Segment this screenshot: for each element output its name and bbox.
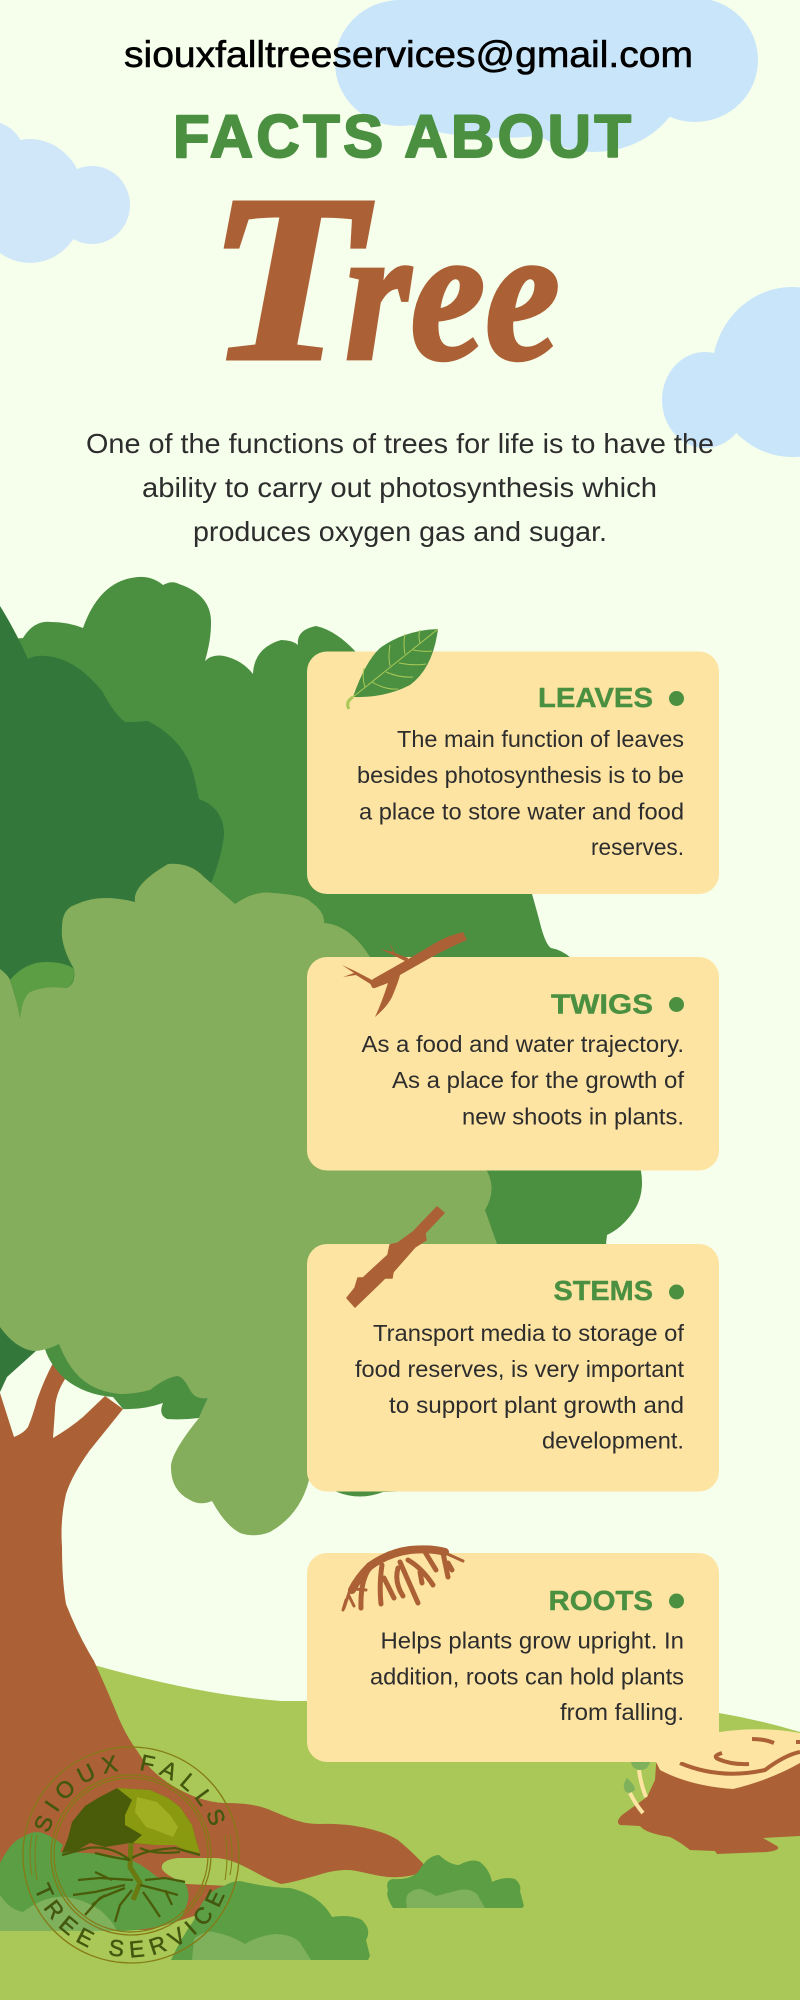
card: stems: food reserves, is very important [355, 1356, 685, 1382]
tree crown: light green [0, 864, 497, 1535]
card: roots: from falling. [560, 1699, 684, 1725]
card: stems [307, 1244, 719, 1492]
intro paragraph: ability to carry out photosynthesis which [142, 472, 657, 503]
logo: sioux falls tree service: SIOUX FALLS [35, 1754, 225, 1832]
tree crown: small patch [10, 962, 74, 1019]
intro paragraph: One of the functions of trees for life is to have the [86, 428, 714, 459]
card: twigs: new shoots in plants. [462, 1104, 684, 1130]
title: tree: T [208, 148, 364, 410]
cloud: left [0, 121, 130, 263]
intro paragraph: produces oxygen gas and sugar. [193, 516, 607, 547]
card: leaves: besides photosynthesis is to be [357, 762, 684, 788]
email address: siouxfalltreeservices@gmail.com [124, 34, 693, 75]
logo: sioux falls tree service: TREE SERVICE [36, 1882, 225, 1958]
intro paragraph [86, 428, 714, 547]
card: twigs: As a place for the growth of [392, 1067, 685, 1093]
card: stems: Transport media to storage of [373, 1320, 685, 1346]
title: facts about: FACTS ABOUT [173, 103, 631, 170]
card: roots [307, 1553, 719, 1762]
card: twigs: TWIGS [551, 988, 653, 1020]
card: stems: development. [542, 1428, 684, 1454]
card: leaves: LEAVES [538, 682, 653, 713]
cloud: right [662, 287, 800, 457]
ground hill [0, 1650, 800, 2000]
bush: middle [171, 1881, 370, 1960]
card: twigs [307, 957, 719, 1170]
bush: left [0, 1832, 188, 1931]
card: roots: ROOTS [548, 1585, 653, 1616]
title: tree: ree [345, 187, 560, 401]
icon: roots [343, 1549, 463, 1610]
card: twigs: As a food and water trajectory. [362, 1031, 684, 1057]
logo: sioux falls tree service [22, 1746, 240, 1964]
icon: leaf [348, 629, 438, 709]
tree crown: dark green [0, 606, 224, 1392]
card: leaves: The main function of leaves [397, 726, 684, 752]
tree stump [618, 1729, 800, 1854]
card: roots: addition, roots can hold plants [370, 1664, 684, 1690]
card: leaves: a place to store water and food [359, 798, 684, 824]
title: tree [208, 148, 560, 410]
cloud: top right [335, 0, 758, 152]
card: leaves: reserves. [591, 834, 684, 860]
tree crown: mid green [0, 577, 642, 1496]
bush: right [387, 1855, 524, 1908]
card: roots: Helps plants grow upright. In [380, 1628, 684, 1654]
icon: twig [342, 932, 467, 1017]
card: stems: to support plant growth and [389, 1392, 684, 1418]
card: stems: STEMS [554, 1275, 653, 1306]
tree trunk and roots [0, 1363, 429, 1930]
card: leaves [307, 652, 719, 894]
icon: stem [347, 1207, 444, 1307]
